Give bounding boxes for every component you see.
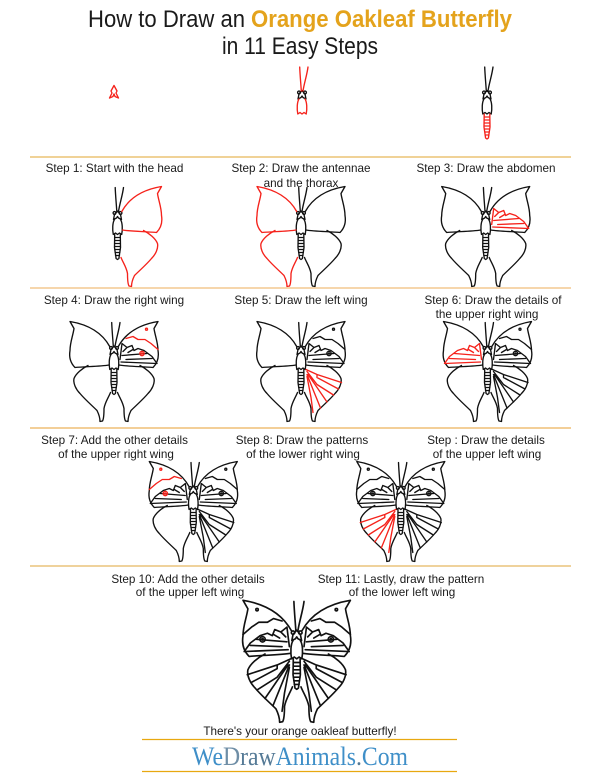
logo: WeDrawAnimals.Com: [192, 742, 408, 771]
caption: step 11: [318, 573, 484, 599]
icon: step 2 antennae and thorax: [297, 67, 308, 114]
drawing: upper right details: [441, 186, 530, 286]
drawing: lower left patterns: [356, 462, 445, 562]
title: Orange Oakleaf Butterfly: [251, 6, 513, 33]
caption: step 8: [236, 434, 368, 461]
caption: step 10: Step 10: Add the other details: [111, 573, 265, 586]
drawing: right wing details: [70, 322, 158, 422]
icon: step 3 abdomen: [482, 67, 493, 139]
caption: step 7: [41, 434, 188, 461]
caption: step 2: Step 2: Draw the antennae: [231, 162, 371, 175]
caption: step 11: Step 11: Lastly, draw the pattern: [318, 573, 484, 586]
title: [88, 6, 513, 60]
caption: step 9: [427, 434, 545, 461]
caption: step 5: Step 5: Draw the left wing: [234, 294, 368, 307]
caption: step 1: Step 1: Start with the head: [46, 162, 183, 175]
drawing: left wing: [257, 186, 345, 286]
drawing: left wing details: [149, 462, 238, 562]
caption: step 7: of the upper right wing: [58, 448, 174, 461]
caption: step 11: of the lower left wing: [349, 586, 455, 599]
caption: step 6: Step 6: Draw the details of: [424, 294, 562, 307]
caption: step 4: Step 4: Draw the right wing: [44, 294, 184, 307]
caption: step 10: of the upper left wing: [136, 586, 244, 599]
caption: step 8: of the lower right wing: [246, 448, 360, 461]
caption: step 2: [231, 162, 371, 190]
caption: step 7: Step 7: Add the other details: [41, 434, 188, 447]
icon: step 1 head: [110, 86, 118, 98]
caption: step 8: Step 8: Draw the patterns: [236, 434, 368, 447]
caption: step 3: Step 3: Draw the abdomen: [416, 162, 556, 175]
closing caption: There's your orange oakleaf butterfly!: [203, 725, 397, 738]
caption: step 6: the upper right wing: [436, 308, 538, 321]
drawing: upper left details: [443, 322, 532, 422]
caption: step 6: [424, 294, 562, 321]
drawing: finished butterfly: [243, 600, 351, 722]
caption: step 2: and the thorax: [264, 177, 339, 190]
caption: step 9: Step : Draw the details: [427, 434, 545, 447]
title: in 11 Easy Steps: [222, 33, 378, 60]
caption: step 9: of the upper left wing: [433, 448, 541, 461]
title: How to Draw an: [88, 6, 245, 33]
drawing: lower right patterns: [257, 322, 345, 422]
drawing: right wing: [113, 186, 162, 286]
caption: step 10: [111, 573, 265, 599]
